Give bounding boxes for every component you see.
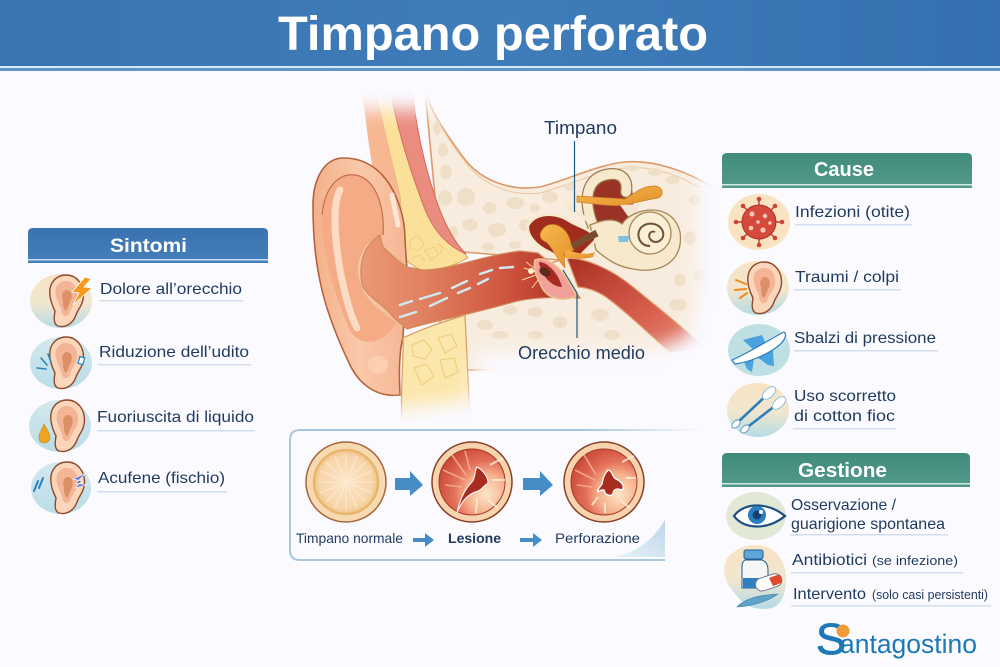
item: Uso scorretto: di cotton fioc [794, 408, 895, 425]
logo: Santagostino: antagostino [840, 629, 977, 659]
panel: eardrum stages [290, 430, 700, 560]
panel: Gestione [722, 453, 991, 609]
heading: Cause [814, 159, 874, 181]
stage labels: Timpano normale [296, 530, 403, 546]
item: Sbalzi [728, 324, 938, 376]
logo: Santagostino [816, 615, 977, 664]
heading [722, 453, 970, 487]
callout: Timpano: Timpano [544, 118, 617, 138]
arrow [395, 471, 423, 496]
item: Traumi: Traumi / colpi [795, 269, 899, 286]
item: Uso scorretto: Uso scorretto [794, 388, 896, 405]
arrow [523, 471, 553, 496]
stage labels: Lesione [448, 530, 501, 546]
logo: Santagostino: S [816, 615, 846, 664]
eardrum: perforation [564, 442, 644, 522]
item: Traumi [727, 261, 901, 315]
fat and skin layers above canal [362, 90, 468, 270]
item: Antibiotici e intervento: (se infezione) [872, 553, 958, 568]
stage labels [296, 530, 640, 547]
item: Osservazione [726, 492, 948, 540]
middle ear cavity with ossicles [528, 215, 597, 268]
item: Infezioni: Infezioni (otite) [795, 204, 910, 221]
panel: Cause [722, 153, 972, 437]
panel: Sintomi [28, 228, 268, 514]
semicircular canals [577, 174, 662, 236]
header banner [0, 0, 1000, 71]
sound waves in canal [400, 267, 513, 317]
item: Fuoriuscita [29, 400, 255, 452]
perforated eardrum [522, 259, 577, 299]
item: Antibiotici e intervento: (solo casi persistenti) [872, 588, 988, 602]
eardrum: lesion [432, 442, 512, 522]
item: Dolore [30, 274, 243, 328]
outer ear [313, 158, 407, 395]
item: Acufene: Acufene (fischio) [98, 470, 225, 487]
title: Timpano perforato [278, 8, 708, 61]
cochlea [590, 210, 680, 270]
item: Fuoriuscita: Fuoriuscita di liquido [97, 409, 254, 426]
wall of middle ear [567, 203, 590, 222]
lower fat tissue [401, 315, 470, 420]
item: Sbalzi: Sbalzi di pressione [794, 330, 936, 347]
item: Acufene [31, 462, 227, 514]
item: Riduzione: Riduzione dell’udito [99, 344, 249, 361]
item: Antibiotici e intervento [724, 545, 991, 609]
item: Dolore: Dolore all’orecchio [100, 281, 242, 298]
heading [722, 153, 972, 188]
callout: Timpano [544, 118, 617, 212]
eardrum: normal [306, 442, 386, 522]
callout: Orecchio medio [518, 270, 645, 363]
item: Osservazione: Osservazione / [791, 497, 897, 514]
temporal bone [425, 96, 712, 371]
item: Infezioni [728, 194, 912, 250]
item: Osservazione: guarigione spontanea [791, 516, 945, 533]
text: Antibiotici: Antibiotici [792, 552, 867, 569]
text: Intervento: Intervento [793, 586, 866, 603]
item: Riduzione [30, 337, 251, 389]
callout: Orecchio medio: Orecchio medio [518, 343, 645, 363]
heading: Gestione [798, 460, 887, 482]
item: Uso scorretto [727, 383, 896, 437]
ear anatomy illustration [313, 90, 740, 420]
heading [28, 228, 268, 263]
heading: Sintomi [110, 236, 187, 257]
stage labels: Perforazione [555, 530, 640, 546]
eustachian tube [567, 258, 705, 352]
ear canal [361, 235, 580, 329]
